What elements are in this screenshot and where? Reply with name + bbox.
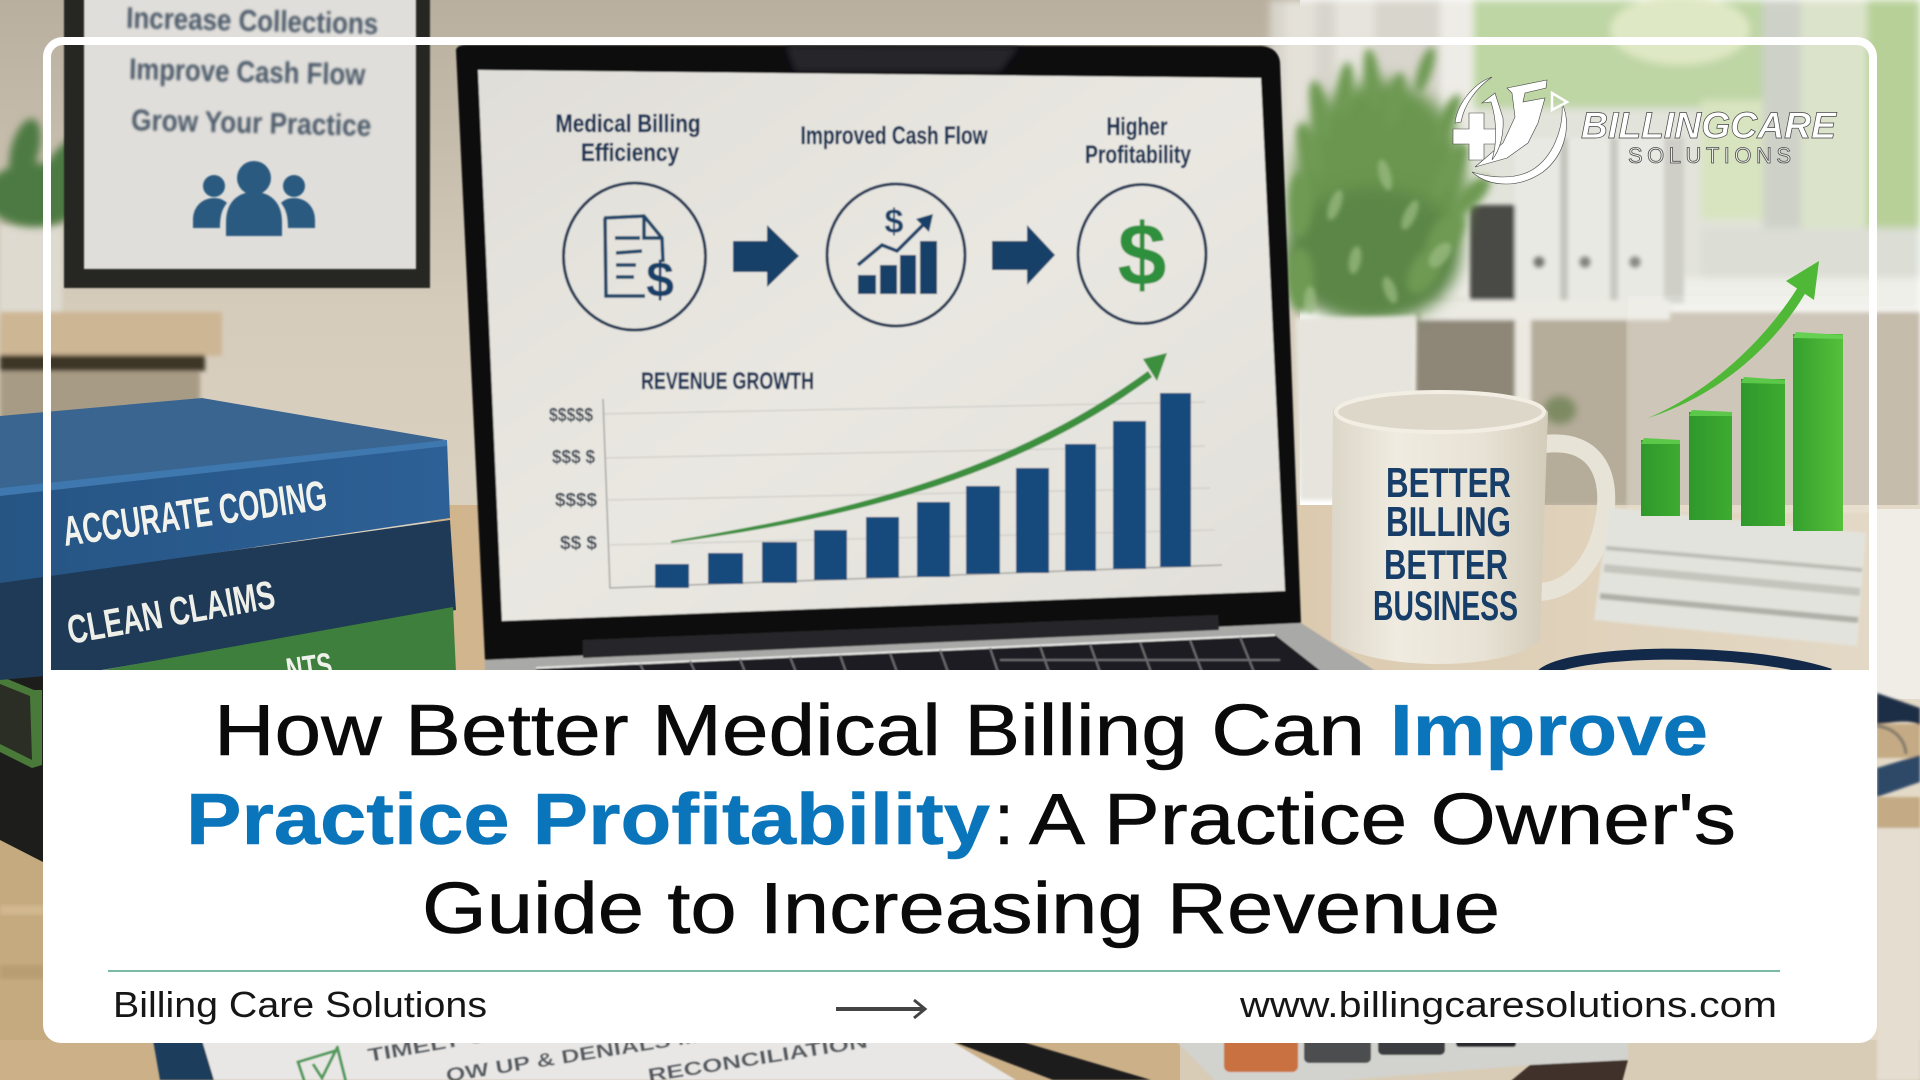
wooden side cabinet bbox=[0, 312, 222, 421]
y-axis labels: $$$ $ bbox=[552, 447, 595, 467]
growth arrow bbox=[671, 353, 1167, 543]
poster text: Grow Your Practice bbox=[131, 104, 372, 143]
wood floor of desk at left bbox=[0, 840, 1920, 1080]
heading: A Practice Owner's bbox=[1029, 780, 1736, 860]
icon: group of people bbox=[193, 161, 315, 236]
mug text: BILLING bbox=[1386, 498, 1511, 545]
book: green outer strip bbox=[0, 676, 42, 768]
icon: billing document in circle: $ bbox=[646, 252, 674, 308]
icon: billing document in circle bbox=[564, 183, 706, 330]
keyboard deck bbox=[485, 623, 1377, 672]
arrow bbox=[836, 1000, 925, 1018]
keyboard keys bbox=[536, 635, 1322, 672]
panel background bbox=[43, 670, 1877, 1043]
coffee mug bbox=[1331, 391, 1606, 664]
billing checklist clipboard bbox=[153, 1025, 1016, 1080]
book: green: NTS bbox=[284, 646, 335, 690]
left wall plant and pot bbox=[0, 115, 113, 321]
glass panel bbox=[1627, 295, 1872, 513]
book: accurate coding bbox=[0, 398, 450, 585]
mug text: BETTER bbox=[1386, 459, 1511, 506]
arrow: efficiency to cash flow bbox=[733, 225, 799, 287]
glass trophy with green bars bbox=[1594, 261, 1872, 646]
plant foliage bbox=[1284, 45, 1496, 323]
icon: green dollar in circle bbox=[1078, 184, 1206, 324]
green arrow bbox=[1648, 261, 1819, 418]
heading: Improve bbox=[1390, 691, 1708, 771]
mug handle bbox=[1540, 443, 1606, 592]
plant behind laptop bbox=[1284, 45, 1496, 500]
flow labels: Improved Cash Flow bbox=[800, 122, 988, 150]
mug body bbox=[1331, 391, 1548, 664]
lower wall under window bbox=[1416, 312, 1920, 512]
book stack bbox=[0, 398, 456, 862]
book: clean claims bbox=[0, 520, 456, 680]
logo bbox=[1453, 77, 1837, 184]
y-axis labels: $$$$ bbox=[555, 490, 597, 510]
heading: : bbox=[994, 780, 1014, 860]
footer url: www.billingcaresolutions.com bbox=[1239, 984, 1777, 1025]
window with garden view bbox=[1473, 0, 1920, 312]
hinge bbox=[583, 615, 1219, 658]
wall bbox=[0, 0, 1300, 620]
book: accurate coding: ACCURATE CODING bbox=[60, 471, 330, 555]
divider bbox=[108, 970, 1780, 972]
calculator bbox=[1175, 1036, 1628, 1080]
checklist text: TIMELY C bbox=[366, 1025, 488, 1067]
mug text: BUSINESS bbox=[1373, 582, 1518, 629]
screen bbox=[478, 70, 1285, 621]
heading: Practice Profitability bbox=[186, 780, 990, 860]
glass base bbox=[1594, 507, 1866, 646]
heading: Guide to Increasing Revenue bbox=[422, 869, 1500, 949]
mug text bbox=[1373, 459, 1518, 629]
flow labels: Medical Billing bbox=[556, 110, 700, 138]
camera sheen bbox=[785, 45, 1020, 72]
icon: green dollar in circle: $ bbox=[1118, 205, 1166, 304]
icon: rising bars in circle bbox=[827, 184, 965, 326]
book: clean claims: CLEAN CLAIMS bbox=[64, 573, 278, 653]
flow labels: Efficiency bbox=[581, 139, 679, 167]
dark lower stack bbox=[0, 640, 43, 862]
poster text: Improve Cash Flow bbox=[129, 53, 366, 92]
icon: rising bars in circle: $ bbox=[885, 203, 904, 241]
white frame border bbox=[47, 41, 1873, 670]
screen bezel bbox=[456, 45, 1301, 660]
poster text: Increase Collections bbox=[126, 2, 379, 41]
green bars bbox=[1641, 332, 1843, 531]
pen bbox=[949, 1040, 1151, 1080]
heading: How Better Medical Billing Can bbox=[214, 691, 1365, 771]
logo mark: cross and swirl bbox=[1453, 77, 1567, 184]
mug rim bbox=[1336, 392, 1544, 432]
flow labels: Profitability bbox=[1085, 141, 1191, 169]
laptop bbox=[456, 45, 1377, 672]
heading bbox=[186, 691, 1736, 949]
footer brand: Billing Care Solutions bbox=[113, 984, 487, 1025]
logo subtitle: SOLUTIONS bbox=[1628, 143, 1791, 168]
checklist text bbox=[366, 1025, 869, 1080]
flow labels bbox=[556, 110, 1191, 169]
y-axis labels bbox=[549, 405, 597, 553]
book: green bbox=[92, 607, 456, 690]
plant pot bbox=[1295, 316, 1416, 500]
flow labels: Higher bbox=[1106, 113, 1168, 141]
stethoscope right tube bbox=[1877, 693, 1920, 1080]
y-axis labels: $$$$$ bbox=[549, 405, 593, 425]
white paper on right bbox=[1877, 509, 1920, 699]
revenue growth chart bbox=[549, 353, 1222, 588]
curtains behind plant bbox=[1270, 0, 1474, 310]
small distant plant bbox=[1544, 396, 1576, 424]
stethoscope bbox=[1542, 654, 1920, 1080]
wall poster bbox=[64, 0, 430, 288]
chart title: REVENUE GROWTH bbox=[641, 368, 814, 395]
title panel bbox=[43, 670, 1877, 1043]
desk surface bbox=[430, 505, 1920, 1080]
mug text: BETTER bbox=[1384, 541, 1508, 588]
bars bbox=[655, 393, 1191, 588]
shelf and white binders bbox=[1416, 138, 1684, 510]
checkbox bbox=[298, 1046, 346, 1080]
arrow: cash flow to profitability bbox=[992, 225, 1055, 285]
logo wordmark: BILLINGCARE bbox=[1581, 105, 1837, 146]
y-axis labels: $$ $ bbox=[560, 533, 597, 553]
poster text bbox=[126, 2, 379, 143]
